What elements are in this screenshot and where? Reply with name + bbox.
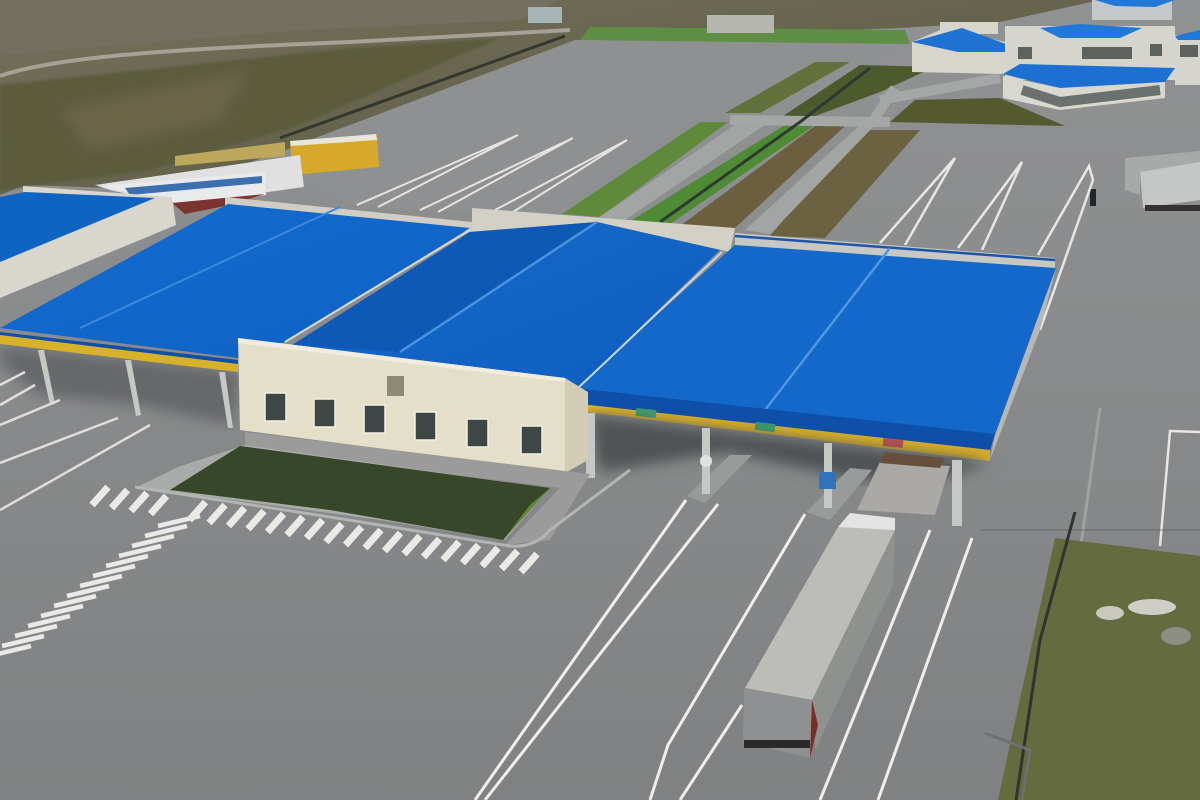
right canopy pillars and booths xyxy=(586,413,962,526)
pedestrian crossing: along the building xyxy=(92,487,537,572)
left canopy pillars xyxy=(38,350,233,428)
roof: left section xyxy=(0,204,470,372)
parked trucks: right xyxy=(1090,151,1200,211)
street lamp: bottom right xyxy=(985,733,1030,800)
left canopy back wall xyxy=(0,186,176,298)
canopy shadow under left canopy xyxy=(0,345,240,425)
pedestrian crossing: left side xyxy=(0,516,200,656)
grass plot: bottom right xyxy=(998,512,1200,800)
curb line xyxy=(135,470,630,546)
upper parking asphalt xyxy=(288,40,915,215)
parked trucks: top left xyxy=(95,134,379,214)
office building xyxy=(238,338,588,473)
front lane markings xyxy=(475,500,972,800)
buildings: top right xyxy=(528,0,1200,110)
upper parking lines xyxy=(357,135,627,212)
canopy back walls xyxy=(225,197,1055,270)
right lane markings xyxy=(880,158,1200,546)
lamp post and fence: right xyxy=(980,408,1200,552)
roof: right section xyxy=(562,245,1056,461)
canopy shadow under right canopy xyxy=(590,415,990,480)
field: top left xyxy=(0,0,1100,195)
truck in front lane xyxy=(743,513,895,758)
green strips and medians xyxy=(562,62,1065,238)
left lane markings xyxy=(0,372,150,510)
roof: middle section xyxy=(285,222,720,388)
grass bed in front of the office xyxy=(137,432,590,545)
